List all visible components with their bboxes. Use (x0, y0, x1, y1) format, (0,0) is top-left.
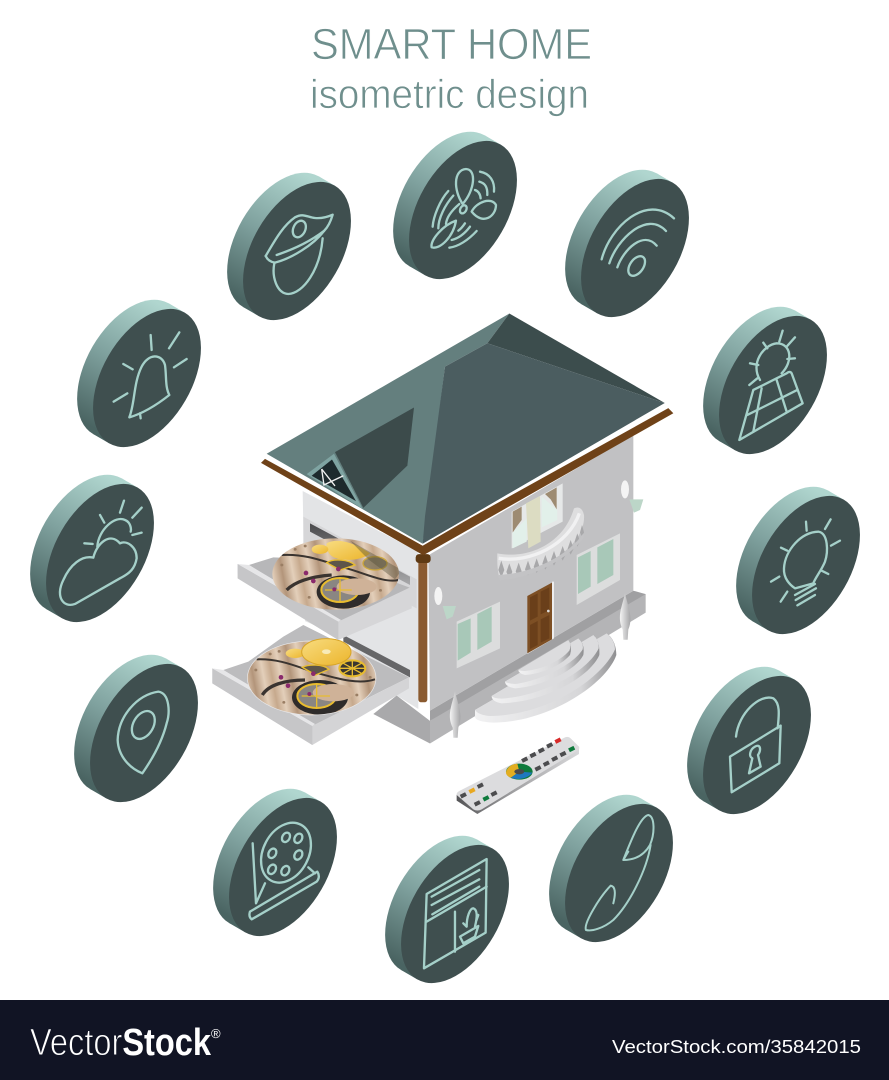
upper drawer opening (303, 517, 417, 608)
title (310, 20, 592, 117)
downpipe (416, 554, 431, 702)
upper window (512, 483, 563, 548)
token: weather (8, 456, 176, 641)
lower disc (247, 639, 376, 715)
token: location pin (52, 636, 220, 821)
upper drawer (238, 517, 417, 640)
token: solar panel (681, 288, 849, 473)
wall details (434, 480, 643, 668)
registered mark: ® (211, 1026, 221, 1041)
left wall (303, 491, 418, 709)
heading: smart home: SMART HOME (311, 20, 592, 69)
token: light bulb (714, 468, 882, 653)
dormer (335, 407, 414, 508)
steps (475, 633, 616, 723)
house shell (303, 435, 646, 743)
token: garage (363, 817, 531, 1002)
vases (450, 593, 630, 738)
wall lamps (434, 480, 643, 619)
token: wifi (543, 151, 711, 336)
upper disc (272, 538, 402, 610)
token: alarm bell (55, 281, 223, 466)
upper right window (577, 533, 620, 605)
logo: vectorstock: VectorStock (30, 1022, 212, 1064)
lower left window (457, 602, 500, 668)
roof edge and gutter (261, 403, 673, 555)
dormer window (307, 454, 363, 509)
token: fan (371, 113, 539, 298)
stock id url: VectorStock.com/35842015 (612, 1037, 861, 1057)
lower drawer (212, 625, 410, 745)
token: security guard cap (205, 154, 373, 339)
roof (261, 314, 673, 555)
token: phone (527, 776, 695, 961)
token: film reel (191, 770, 359, 955)
door (527, 582, 554, 654)
token: padlock (665, 648, 833, 833)
subheading: isometric design: isometric design (310, 71, 589, 117)
balcony (497, 507, 584, 580)
remote control (457, 737, 579, 814)
footer bar (0, 1000, 889, 1080)
house (212, 314, 673, 814)
plinth (373, 591, 646, 743)
right wall (428, 435, 633, 711)
